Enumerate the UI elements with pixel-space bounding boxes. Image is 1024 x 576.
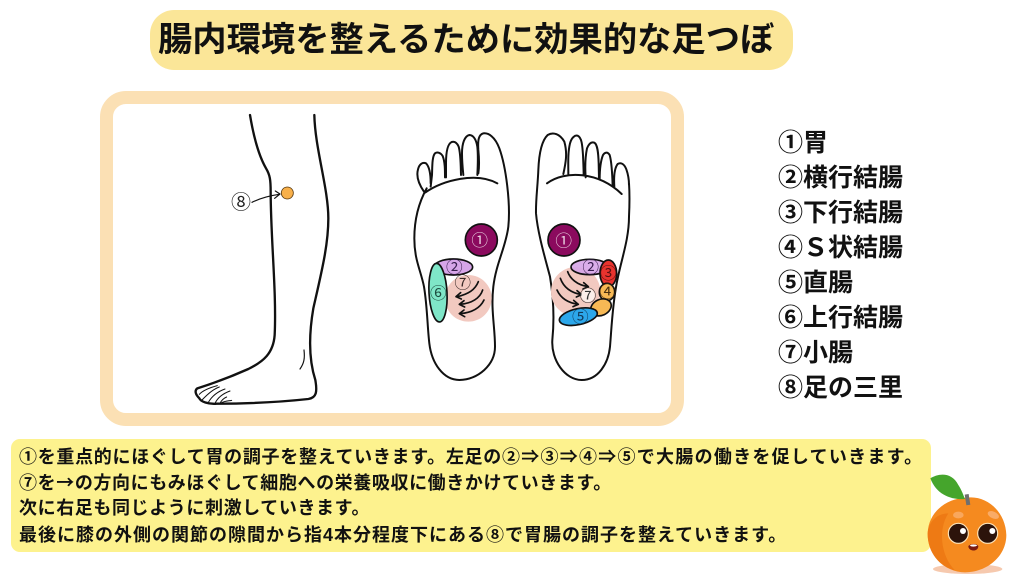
line 2: ⑦を→の方向にもみほぐして細胞への栄養吸収に働きかけていきます。	[19, 469, 612, 495]
line 3: 次に右足も同じように刺激していきます。	[19, 498, 370, 518]
zone bend	[588, 296, 614, 319]
item 5: ⑤直腸	[778, 269, 853, 297]
illustration: right sole: ⑤	[572, 304, 589, 328]
label: 8: ⑧	[231, 186, 251, 215]
zone 6	[427, 263, 449, 322]
item 4: ④Ｓ状結腸	[778, 234, 903, 262]
zone 2	[571, 259, 608, 275]
body	[928, 497, 1006, 572]
illustration: left sole: ①	[471, 227, 488, 251]
zone 2	[434, 259, 473, 275]
illustration: left sole: ⑦	[454, 270, 471, 294]
illustration: right sole: ④	[599, 278, 616, 302]
item 2: ②横行結腸	[778, 164, 903, 192]
illustration: right sole: ⑦	[580, 282, 597, 306]
line 1: ①を重点的にほぐして胃の調子を整えていきます。左足の②⇒③⇒④⇒⑤で大腸の働きを促していきます。	[19, 447, 923, 467]
illustration: right sole	[536, 134, 629, 380]
icon: orange mascot	[928, 474, 1006, 574]
item 8: ⑧足の三里	[778, 374, 903, 402]
item 7: ⑦小腸	[778, 339, 853, 367]
illustration: left sole	[414, 133, 509, 380]
leaf	[930, 475, 965, 499]
zone 7	[551, 267, 600, 316]
title	[150, 10, 793, 70]
zone 7	[445, 275, 492, 322]
panel: illustration frame	[100, 91, 684, 426]
illustration: right sole: ②	[582, 254, 599, 278]
zone 1	[548, 224, 580, 256]
icon: acupoint 8	[281, 187, 293, 199]
line 4: 最後に膝の外側の関節の隙間から指4本分程度下にある⑧で胃腸の調子を整えていきます。	[19, 525, 787, 545]
illustration: leg side view	[196, 115, 328, 404]
item 6: ⑥上行結腸	[778, 304, 903, 332]
shadow	[933, 564, 1002, 574]
foot outline	[414, 133, 509, 380]
stem	[967, 494, 968, 505]
eyes	[948, 523, 968, 543]
illustration: left sole: ②	[446, 254, 463, 278]
title: 腸内環境を整えるために効果的な足つぼ	[158, 21, 774, 59]
arrows 7	[456, 282, 484, 317]
zone 3	[600, 260, 617, 287]
text box: instructions	[11, 439, 931, 552]
zone 5	[558, 305, 599, 329]
illustration: right sole: ③	[600, 260, 617, 284]
arrows 7	[557, 272, 588, 307]
illustration: left sole: ⑥	[430, 280, 447, 304]
zone 4	[599, 283, 615, 301]
foot outline	[536, 134, 629, 380]
item 3: ③下行結腸	[778, 199, 903, 227]
item 1: ①胃	[778, 129, 828, 157]
legend list	[778, 129, 903, 402]
arrow: 8 to point	[252, 191, 280, 202]
zone 1	[465, 224, 497, 256]
mouth	[968, 544, 978, 551]
illustration: right sole: ①	[555, 227, 572, 251]
